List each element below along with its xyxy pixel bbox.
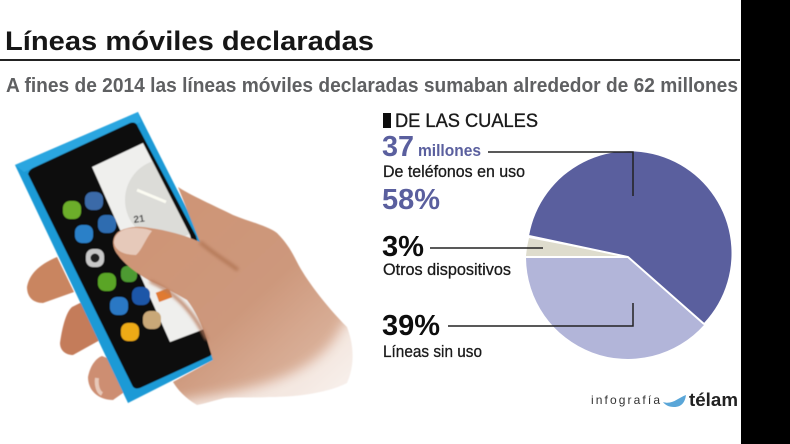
knuckle shading (200, 242, 238, 270)
phone screen (28, 122, 222, 389)
slice: líneas sin uso 39% (526, 257, 704, 359)
label: 37 millones de teléfonos en uso 58%: De teléfonos en uso (383, 162, 525, 181)
leader line: otros dispositivos (430, 247, 543, 249)
label: 37 millones de teléfonos en uso 58%: 37 (382, 131, 414, 163)
screen white panel (92, 143, 215, 342)
illustration: hand holding phone (14, 111, 353, 406)
label: 37 millones de teléfonos en uso 58%: 58% (382, 184, 440, 216)
credit: infografía télam (591, 390, 738, 410)
slice: otros dispositivos 3% (526, 238, 628, 257)
label: 39% líneas sin uso: 39% (382, 310, 440, 342)
label: 37 millones de teléfonos en uso 58% (382, 131, 525, 216)
slice: teléfonos en uso 58% (529, 151, 732, 323)
label: 3% otros dispositivos (382, 231, 511, 279)
pie chart (526, 151, 732, 359)
fingers behind phone (27, 257, 130, 400)
title: Líneas móviles declaradas (5, 26, 374, 56)
leader line: líneas sin uso (448, 303, 633, 326)
label: 39% líneas sin uso: Líneas sin uso (383, 342, 482, 361)
section heading: DE LAS CUALES (395, 110, 538, 132)
label: 3% otros dispositivos: Otros dispositivos (383, 260, 511, 279)
illustration: hand holding phone: 21 (133, 213, 146, 226)
subtitle: A fines de 2014 las líneas móviles declaradas sumaban alrededor de 62 millones (6, 75, 738, 97)
hand front with thumb (113, 187, 353, 405)
credit: infografía télam: télam (689, 390, 738, 410)
phone body (15, 112, 228, 403)
thumbnail (114, 228, 152, 255)
credit: infografía télam: infografía (591, 393, 660, 407)
label: 39% líneas sin uso (382, 310, 482, 361)
leader line: teléfonos en uso (488, 152, 633, 196)
black side bar (741, 0, 790, 444)
app icons (63, 192, 172, 341)
icon: télam wave (663, 395, 686, 407)
label: 37 millones de teléfonos en uso 58%: millones (418, 141, 481, 160)
wrist fade (175, 320, 385, 425)
title rule (0, 59, 740, 61)
label: 3% otros dispositivos: 3% (382, 231, 424, 263)
